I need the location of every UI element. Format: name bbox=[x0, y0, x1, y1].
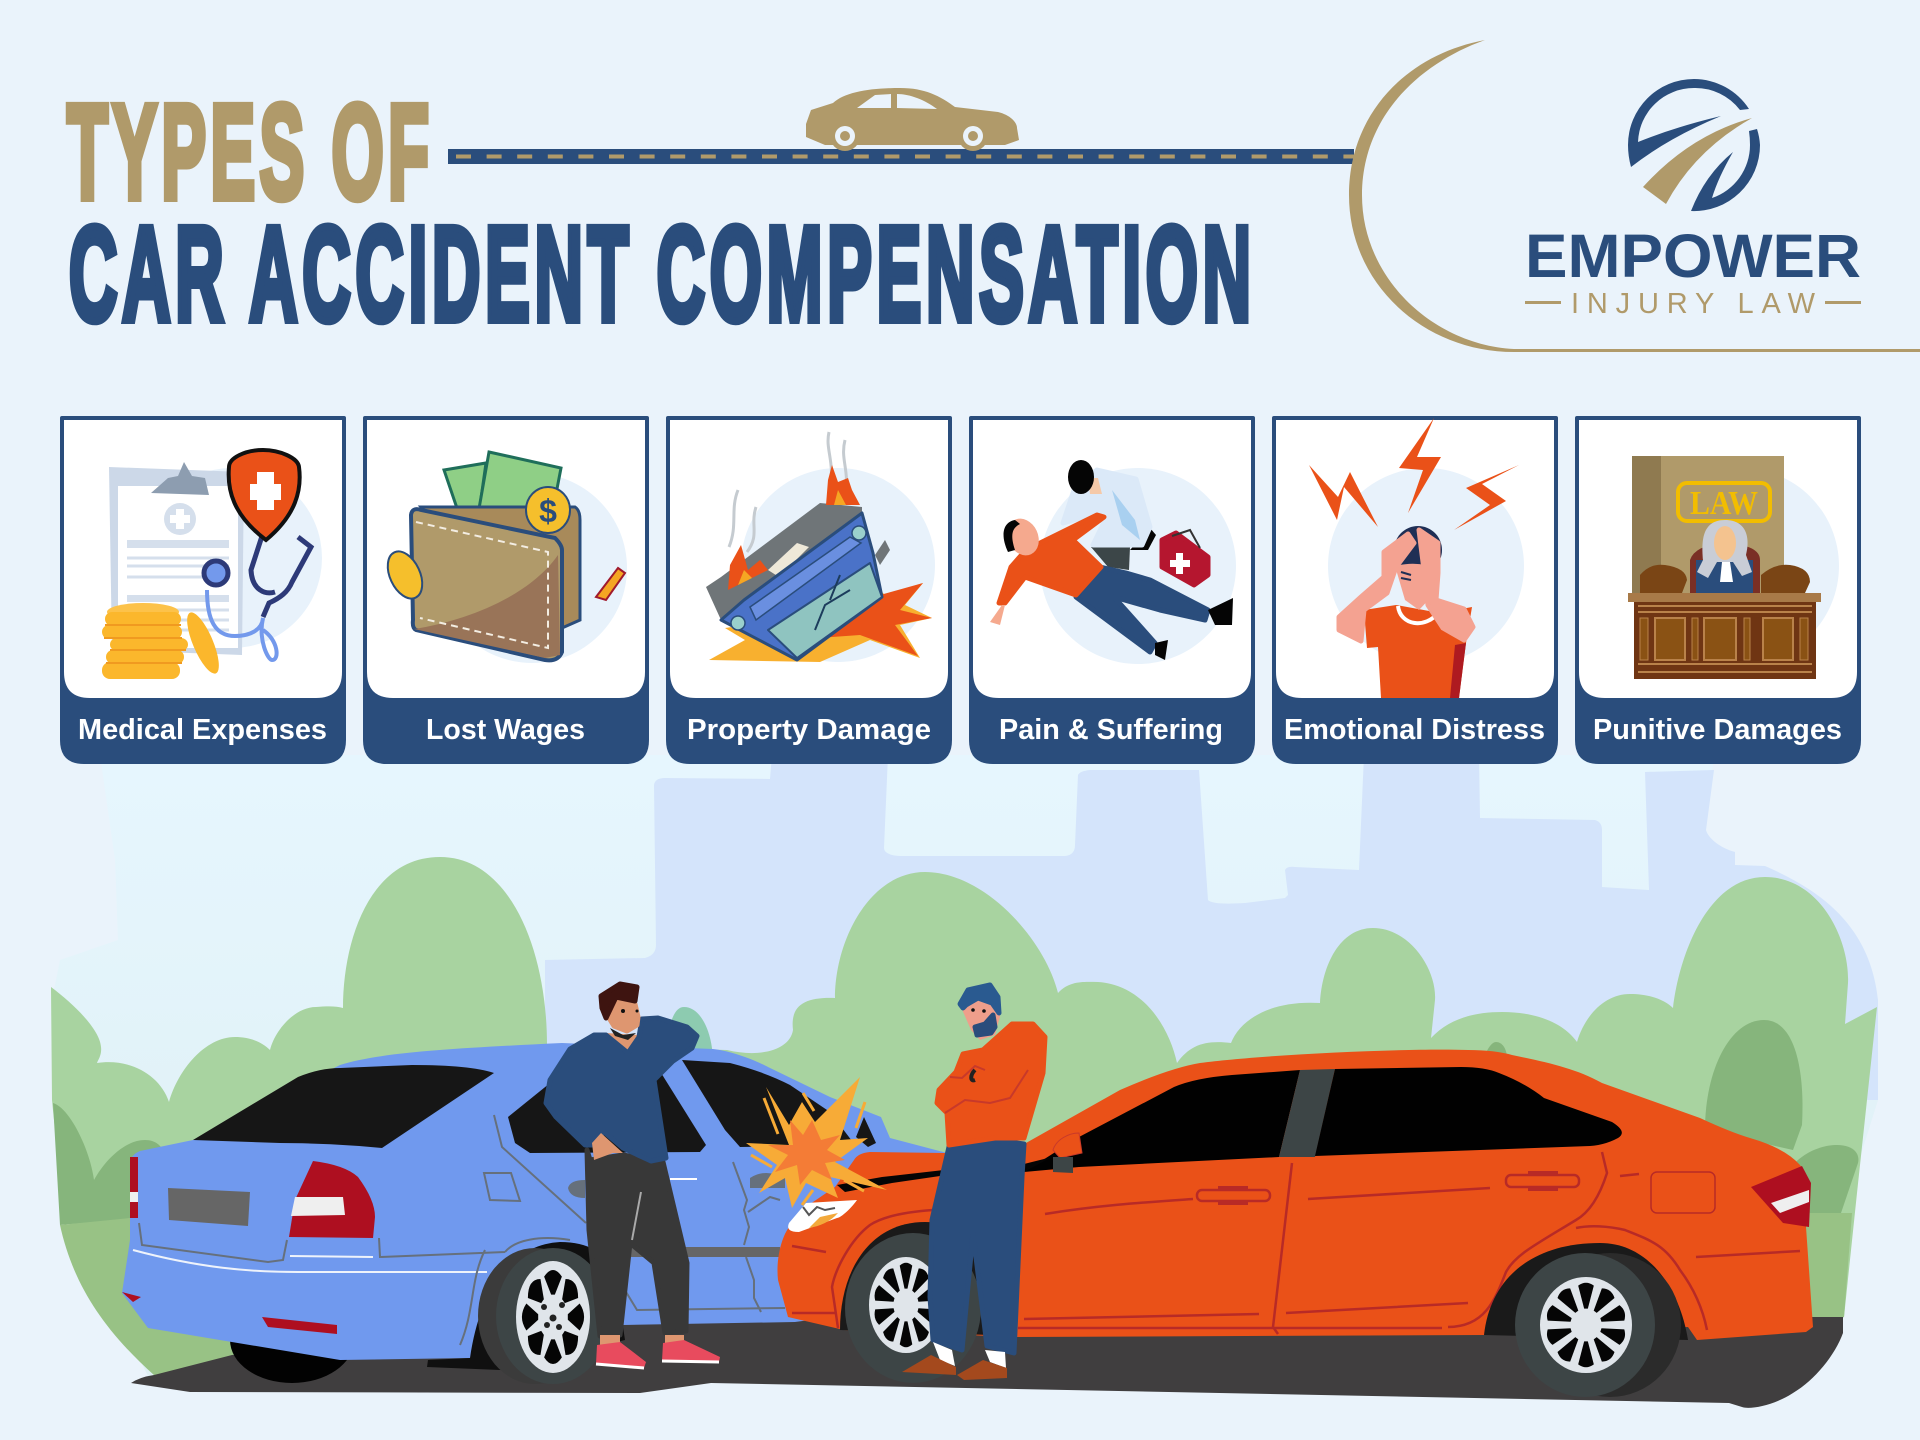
shoes bbox=[902, 1342, 1007, 1380]
wheel arch bbox=[427, 1242, 625, 1370]
falling coin bbox=[381, 546, 429, 604]
hand bbox=[592, 1133, 623, 1160]
gold crescent frame bbox=[1349, 40, 1920, 352]
hair bbox=[1394, 526, 1442, 574]
coin edge bbox=[596, 568, 625, 600]
sweater bbox=[546, 1018, 697, 1161]
arms bbox=[1339, 534, 1414, 641]
man with blue sweater bbox=[546, 984, 720, 1368]
wallet back bbox=[421, 507, 580, 628]
pants bbox=[587, 1150, 687, 1336]
panel: emotional distress bbox=[1272, 416, 1558, 764]
icon: burning overturned car bbox=[706, 432, 935, 662]
headlight bbox=[788, 1200, 857, 1232]
panel: medical expenses bbox=[60, 416, 346, 764]
fuel door bbox=[1651, 1172, 1715, 1213]
trousers bbox=[930, 1140, 1024, 1353]
victim bbox=[990, 513, 1233, 660]
blue car body bbox=[122, 1043, 960, 1360]
panel: lost wages bbox=[363, 416, 649, 764]
label: Lost Wages bbox=[426, 714, 585, 746]
orange car front wheel bbox=[845, 1233, 981, 1383]
rear window bbox=[193, 1065, 494, 1148]
icon: wallet bbox=[381, 452, 627, 663]
logo tagline: INJURY LAW bbox=[1571, 288, 1816, 320]
law sign: LAW bbox=[1690, 485, 1758, 522]
city skyline bbox=[545, 755, 1878, 1100]
smoke bbox=[729, 432, 846, 552]
crash burst bbox=[746, 1077, 887, 1208]
blue car bbox=[122, 1043, 960, 1384]
front window bbox=[682, 1060, 855, 1147]
pillar bbox=[1279, 1069, 1335, 1157]
door lines bbox=[792, 1152, 1800, 1334]
coin: $ bbox=[539, 493, 557, 529]
shirt bbox=[1364, 605, 1472, 698]
label: Property Damage bbox=[687, 714, 931, 746]
coins bbox=[102, 603, 225, 679]
coin bbox=[526, 487, 570, 533]
title: car accident compensation: CAR ACCIDENT COMPENSATION bbox=[69, 200, 1251, 349]
number plate bbox=[168, 1188, 250, 1226]
medic bbox=[1063, 460, 1156, 570]
icon: courtroom bbox=[1628, 456, 1839, 679]
icon: injured person with medic bbox=[990, 460, 1236, 664]
logo mark bbox=[1628, 79, 1760, 211]
road bbox=[131, 1317, 1843, 1408]
trees bbox=[51, 857, 1877, 1375]
bank notes bbox=[444, 452, 561, 520]
neck bbox=[606, 1033, 639, 1053]
arch rear bbox=[1484, 1243, 1688, 1340]
wallet body bbox=[411, 509, 562, 660]
orange car body bbox=[777, 1050, 1813, 1340]
blue car main wheel bbox=[478, 1248, 610, 1384]
tail lamp bbox=[130, 1157, 375, 1238]
first aid kit bbox=[1162, 530, 1208, 585]
tail light bbox=[1751, 1166, 1811, 1227]
man with orange sweater bbox=[902, 985, 1045, 1380]
logo: empower injury law bbox=[1525, 79, 1861, 320]
collar bbox=[1398, 606, 1439, 623]
clipboard bbox=[109, 462, 244, 655]
side window rear bbox=[508, 1068, 706, 1153]
windshield side window front bbox=[1024, 1070, 1300, 1172]
lightning bolts bbox=[1309, 418, 1519, 530]
panel: pain and suffering bbox=[969, 416, 1255, 764]
shoes bbox=[596, 1335, 720, 1368]
chairs bbox=[1640, 565, 1810, 593]
road line bbox=[448, 149, 1354, 164]
mirror bbox=[1053, 1133, 1082, 1173]
scene background: sky bbox=[52, 755, 1878, 1380]
rear wheel far bbox=[230, 1297, 354, 1383]
shield bbox=[229, 450, 300, 540]
door handles bbox=[1197, 1175, 1579, 1201]
judge bench bbox=[1628, 593, 1821, 679]
panel: punitive damages bbox=[1575, 416, 1861, 764]
head bbox=[960, 985, 1000, 1040]
car underbody bbox=[706, 503, 862, 620]
icon: gold car bbox=[806, 88, 1019, 151]
panel: property damage bbox=[666, 416, 952, 764]
label: Emotional Distress bbox=[1284, 714, 1545, 746]
icon: medical bbox=[102, 450, 322, 679]
label: Pain & Suffering bbox=[999, 714, 1223, 746]
wall bbox=[1632, 456, 1784, 596]
arch front bbox=[840, 1222, 990, 1335]
label: Medical Expenses bbox=[78, 714, 327, 746]
face bbox=[1395, 564, 1438, 610]
stethoscope bbox=[204, 533, 311, 660]
judge bbox=[1696, 520, 1753, 593]
title: types of: TYPES OF bbox=[67, 78, 429, 227]
ground explosion bbox=[709, 583, 932, 662]
label: Punitive Damages bbox=[1593, 714, 1842, 746]
orange car rear wheel bbox=[1515, 1253, 1681, 1397]
orange sweater bbox=[937, 1024, 1045, 1145]
car body bbox=[721, 513, 882, 660]
hood crease bbox=[837, 1157, 1052, 1192]
window rear bbox=[1315, 1067, 1622, 1156]
logo wordmark: EMPOWER bbox=[1525, 222, 1861, 290]
bumper reflectors bbox=[122, 1292, 337, 1334]
head bbox=[601, 984, 638, 1040]
orange car bbox=[777, 1050, 1813, 1397]
trim lines bbox=[133, 1115, 785, 1345]
icon: distressed man bbox=[1309, 418, 1524, 698]
flames bbox=[728, 465, 860, 590]
